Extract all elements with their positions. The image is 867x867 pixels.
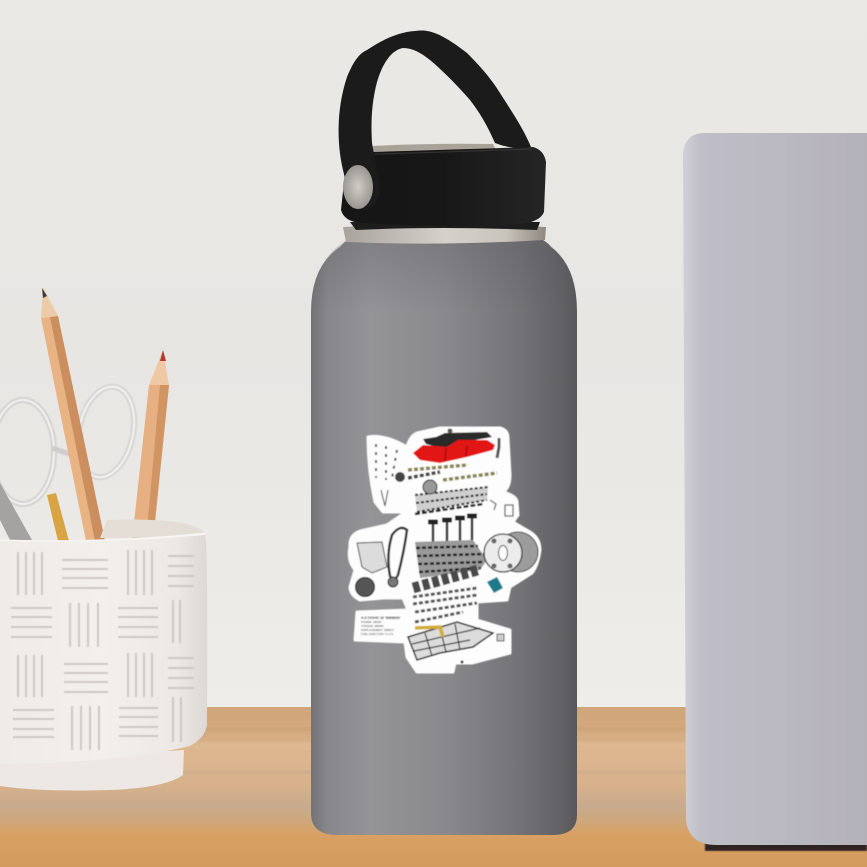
bearings and caps <box>413 588 477 622</box>
oil filter <box>487 577 503 593</box>
small gasket <box>497 634 504 641</box>
front cover <box>357 542 387 573</box>
laptop <box>683 133 867 851</box>
valve cover lid <box>423 432 492 449</box>
cylinder head <box>415 480 488 514</box>
left pencil <box>41 287 105 541</box>
side bracket <box>490 500 513 516</box>
steel neck ring <box>343 224 546 244</box>
left small parts <box>376 444 397 480</box>
oil pan <box>408 622 493 660</box>
spec text: DISPLACEMENT: 3998CC <box>361 628 394 632</box>
grey tool <box>0 483 32 540</box>
valve pair <box>381 490 388 506</box>
valves and pistons <box>428 514 477 543</box>
spec text: 4.0 DOHC i6 'BINBIN' <box>361 615 401 620</box>
yellow oil pipe <box>415 627 443 637</box>
cup base <box>0 750 184 790</box>
spec text <box>361 615 401 636</box>
pencil cup contents <box>0 287 169 541</box>
spec text: POWER: 280HP <box>361 620 382 624</box>
wooden table <box>0 707 867 867</box>
engine block <box>415 540 487 578</box>
valve cover red <box>413 440 495 463</box>
yellow pencil <box>47 493 69 541</box>
cup weave pattern <box>11 550 194 750</box>
timing chain <box>388 528 407 579</box>
icon: scissor handles <box>0 381 142 504</box>
right pencil <box>132 350 169 541</box>
drain plug <box>460 660 464 664</box>
tensioner <box>388 577 398 587</box>
cup front <box>0 535 207 764</box>
bottle body <box>311 240 577 835</box>
oil cap <box>448 428 452 434</box>
handle strap <box>339 30 531 210</box>
spec text: TORQUE: 380NM <box>361 624 384 628</box>
flywheel <box>484 532 538 572</box>
crankshaft <box>413 570 478 588</box>
sticker white die-cut <box>349 428 540 672</box>
camshafts <box>408 465 497 480</box>
white pattern cup <box>0 520 207 790</box>
cup inner rim <box>100 520 205 538</box>
pulley <box>356 578 374 596</box>
coil stick <box>497 438 499 458</box>
spec text: FUEL INJECTION / 6 CYL <box>361 632 394 636</box>
lid top plate <box>373 144 497 153</box>
water bottle <box>311 30 577 835</box>
cap <box>341 147 546 226</box>
pivot bolt <box>343 165 373 209</box>
cam gear <box>395 472 405 482</box>
sticker: exploded engine <box>349 428 540 672</box>
